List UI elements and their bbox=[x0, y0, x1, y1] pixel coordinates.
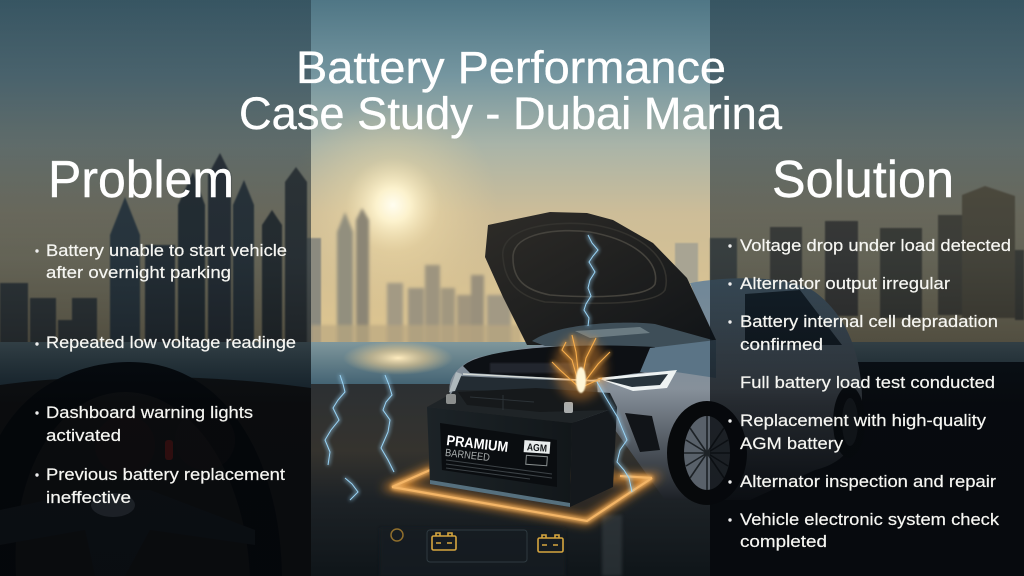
bullet: AGM replacement bbox=[728, 411, 987, 453]
battery brand text: BARNEED bbox=[444, 447, 491, 464]
background: Dubai Marina skyline, left bbox=[0, 153, 321, 345]
headlight inner bbox=[605, 374, 668, 387]
background: sky bbox=[0, 0, 1024, 345]
bullet: warning lights: Dashboard warning lights bbox=[46, 403, 253, 422]
battery brand text bbox=[444, 433, 509, 466]
lower intake bbox=[625, 413, 660, 452]
line: load test: Full battery load test conducted bbox=[740, 373, 995, 392]
title: Battery Performance bbox=[296, 42, 726, 93]
hood chrome strip bbox=[463, 374, 600, 381]
bullet: AGM replacement: Replacement with high-quality bbox=[740, 411, 987, 430]
bullet: cell degradation: Battery internal cell depradation bbox=[740, 312, 998, 331]
lightning bolts bbox=[325, 235, 632, 500]
front bumper behind battery bbox=[450, 376, 598, 398]
background: sun glow bbox=[288, 100, 498, 310]
bullet: previous replacement bbox=[35, 465, 285, 507]
icon: battery warning bbox=[432, 533, 456, 550]
side windows bbox=[745, 290, 842, 345]
hood inner ribs bbox=[503, 223, 666, 303]
bullet: cell degradation bbox=[728, 312, 998, 354]
bullet: previous replacement: Previous battery replacement bbox=[46, 465, 285, 484]
panel: solution bbox=[728, 151, 1011, 551]
background: foreground ground bbox=[311, 384, 1024, 576]
title: Case Study - Dubai Marina bbox=[239, 88, 783, 139]
battery bbox=[427, 388, 617, 507]
terminals bbox=[446, 394, 456, 404]
bullet: warning lights bbox=[35, 403, 253, 445]
bullet: electronic check bbox=[728, 510, 1000, 551]
headlight bbox=[597, 370, 677, 391]
bullet: electronic check: Vehicle electronic system check bbox=[740, 510, 1000, 529]
battery front face bbox=[427, 407, 572, 507]
engine parts bbox=[490, 363, 590, 373]
heading: problem: Problem bbox=[48, 151, 234, 209]
background: skyline, right bbox=[675, 186, 1024, 320]
glowing base outline bbox=[392, 470, 652, 521]
AGM badge bbox=[523, 440, 550, 466]
background: road on right bbox=[710, 362, 1024, 576]
title bbox=[239, 42, 783, 139]
fender bbox=[640, 340, 716, 378]
battery label panel bbox=[440, 423, 557, 487]
car interior: dashboard and steering wheel, left bbox=[0, 362, 311, 576]
battery bottom ribs bbox=[430, 480, 570, 507]
bullet: warning lights: activated bbox=[46, 426, 121, 445]
bullet: battery unable to start: Battery unable to start vehicle bbox=[46, 241, 287, 260]
windshield highlight bbox=[575, 327, 650, 338]
bullet: alternator output: Alternator output irregular bbox=[740, 274, 950, 293]
icon: battery warning 2 bbox=[538, 535, 563, 552]
windshield band bbox=[532, 323, 716, 350]
background: marina water bbox=[0, 342, 1024, 388]
bullet: electronic check: completed bbox=[740, 532, 827, 551]
front wheel bbox=[667, 401, 747, 505]
bullet: alternator repair: Alternator inspection and repair bbox=[740, 472, 996, 491]
battery side face bbox=[570, 407, 617, 507]
battery top bbox=[427, 390, 617, 423]
battery fine print bbox=[446, 460, 552, 479]
bullet: AGM replacement: AGM battery bbox=[740, 434, 844, 453]
open car hood bbox=[485, 212, 716, 345]
spark burst bbox=[552, 335, 610, 400]
left panel overlay bbox=[0, 0, 311, 576]
background: sun reflection on water bbox=[343, 341, 453, 375]
bullet: battery unable to start: after overnight parking bbox=[46, 263, 231, 282]
bullet: cell degradation: confirmed bbox=[740, 335, 823, 354]
bullet: previous replacement: ineffective bbox=[46, 488, 131, 507]
background: skyline, centre bbox=[311, 208, 521, 347]
front left lamp bbox=[449, 372, 462, 392]
dashboard display with battery warning icons bbox=[380, 515, 622, 576]
right panel overlay bbox=[710, 0, 1024, 576]
AGM badge: AGM bbox=[527, 442, 547, 455]
bullet: battery unable to start bbox=[35, 241, 287, 282]
car body bbox=[449, 278, 865, 505]
rear wheel bbox=[833, 386, 865, 458]
battery brand text: PRAMIUM bbox=[446, 433, 509, 456]
bullet: voltage drop: Voltage drop under load detected bbox=[740, 236, 1011, 255]
engine bay bbox=[463, 346, 655, 380]
bullet: low voltage: Repeated low voltage readinge bbox=[46, 333, 296, 352]
heading: solution: Solution bbox=[772, 151, 954, 209]
panel: problem bbox=[35, 151, 296, 507]
